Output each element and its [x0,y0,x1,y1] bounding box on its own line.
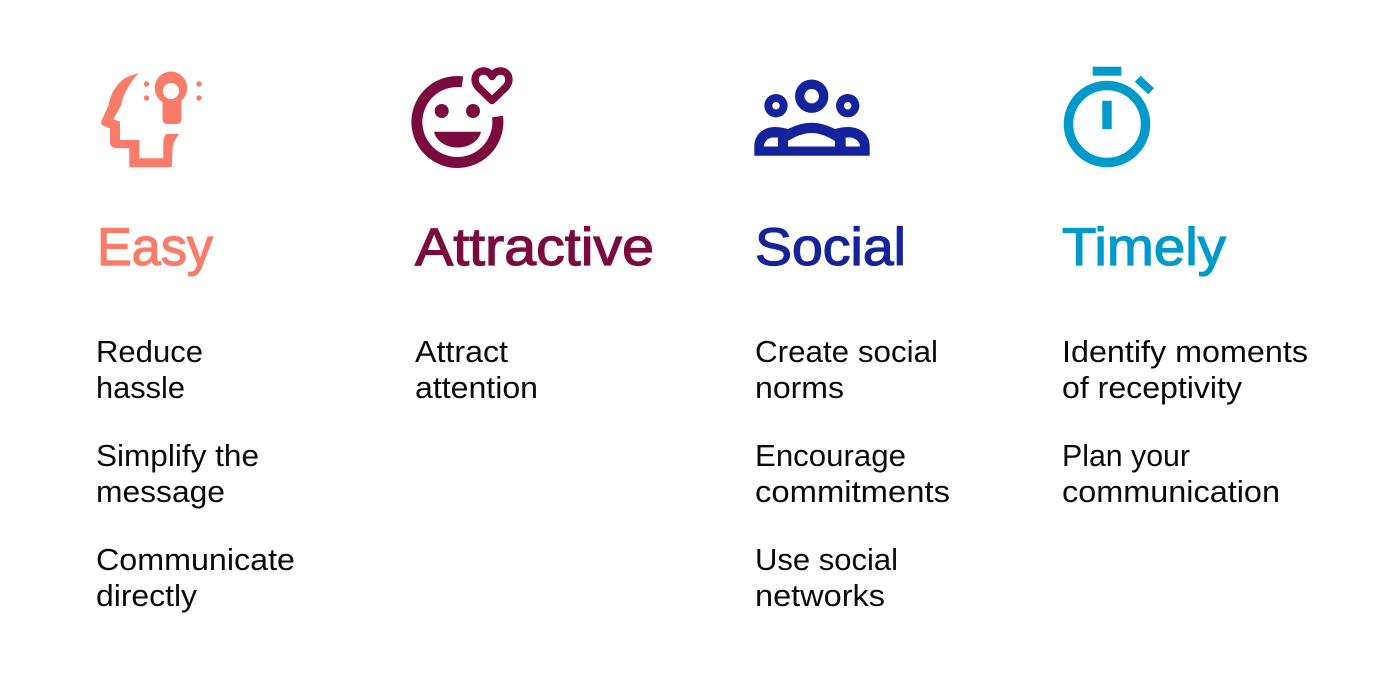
icon: group of people [754,80,870,156]
text: Attractive actions: attention [415,371,538,405]
icon: head with light bulb [101,72,202,167]
text: Easy actions: Simplify the [96,439,259,473]
heading: Attractive: Attractive [415,218,654,277]
text: Easy actions: directly [96,579,198,613]
text: Attractive actions [415,335,538,405]
text: Timely actions [1062,335,1308,509]
text: Social actions: norms [755,371,844,405]
text: Social actions: networks [755,579,885,613]
text: Easy actions: Communicate [96,543,295,577]
panel: Easy [96,72,295,613]
heading: Easy: Easy [97,218,214,277]
icon: smiling face with heart [417,71,509,162]
icon: stopwatch [1068,67,1154,162]
text: Attractive actions: Attract [415,335,509,369]
text: Easy actions: Reduce [96,335,203,369]
text: Social actions: Create social [755,335,938,369]
heading: Timely: Timely [1062,218,1227,277]
text: Easy actions: hassle [96,371,185,405]
panel: Social [754,80,950,613]
text: Timely actions: Identify moments [1062,335,1308,369]
text: Social actions [755,335,950,613]
text: Timely actions: of receptivity [1062,371,1243,405]
text: Social actions: commitments [755,475,950,509]
heading: Social: Social [755,218,906,277]
text: Easy actions: message [96,475,225,509]
text: Timely actions: communication [1062,475,1280,509]
text: Social actions: Use social [755,543,898,577]
text: Easy actions [96,335,295,613]
text: Timely actions: Plan your [1062,439,1190,473]
text: Social actions: Encourage [755,439,906,473]
panel: Timely [1062,67,1308,509]
panel: Attractive [415,71,654,405]
